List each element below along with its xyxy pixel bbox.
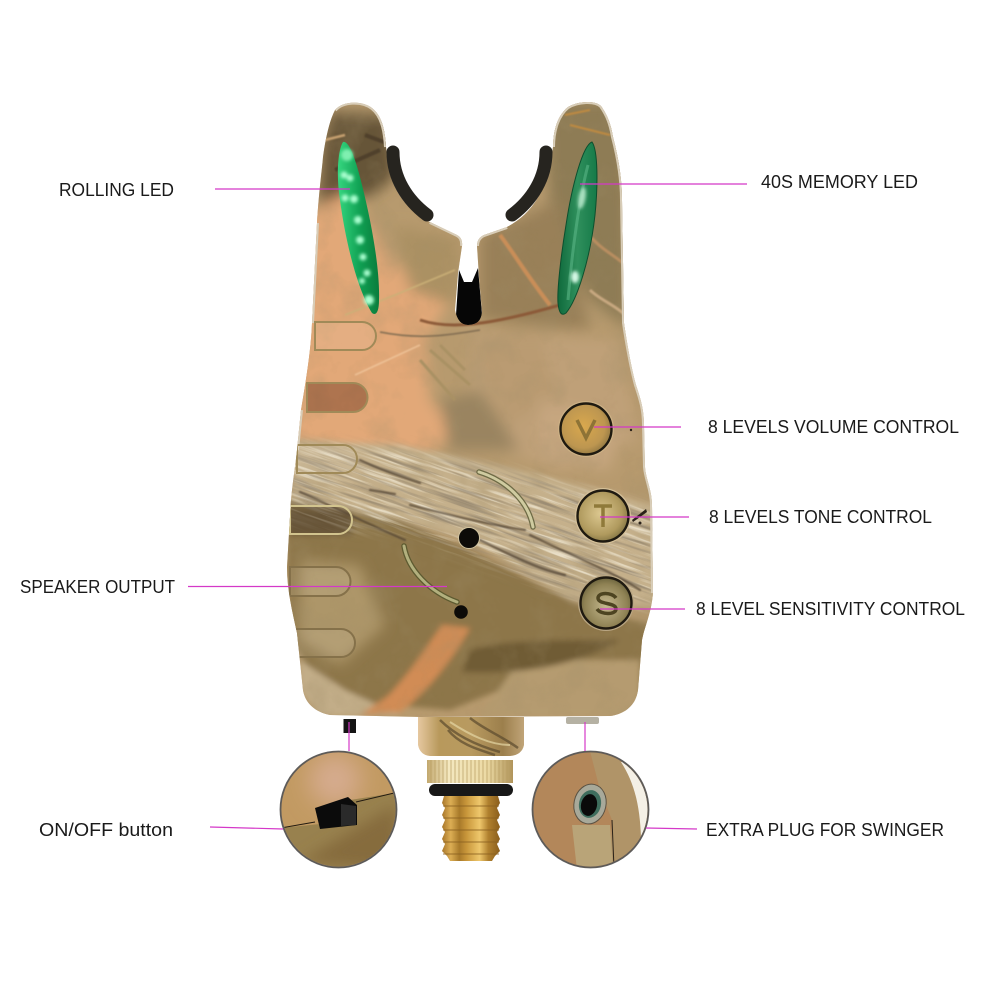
threaded mount	[418, 717, 524, 861]
brass thread	[442, 796, 500, 861]
alarm body	[287, 102, 653, 717]
black line clips	[393, 152, 546, 215]
line slot	[456, 268, 482, 326]
shell edge highlight	[297, 102, 653, 593]
camo shell	[287, 102, 653, 717]
finger grip slots	[290, 322, 376, 657]
knurled nut	[427, 760, 513, 783]
button: T	[575, 488, 631, 544]
speaker holes	[454, 528, 480, 619]
label: on/off: ON/OFF button	[39, 820, 173, 840]
LED: rolling	[338, 142, 379, 314]
label: memory LED: 40S MEMORY LED	[761, 172, 918, 192]
power switch stub	[344, 719, 356, 733]
soft mottling	[303, 118, 648, 658]
rubber O-ring	[429, 784, 513, 796]
inset: swinger plug	[532, 751, 652, 870]
label: tone: 8 LEVELS TONE CONTROL	[709, 507, 932, 527]
button: S	[578, 575, 634, 631]
label: swinger plug: EXTRA PLUG FOR SWINGER	[706, 820, 944, 840]
label: rolling LED: ROLLING LED	[59, 180, 174, 200]
marks near T button	[630, 429, 647, 524]
wood grain streaks	[291, 440, 652, 612]
label: sensitivity: 8 LEVEL SENSITIVITY CONTROL	[696, 599, 965, 619]
twig lines on upper camo	[325, 110, 625, 400]
LED: memory	[558, 142, 597, 314]
camo collar	[418, 717, 524, 756]
leader lines	[188, 184, 747, 829]
label: speaker: SPEAKER OUTPUT	[20, 577, 175, 597]
plug stub	[566, 717, 599, 724]
button: V	[558, 401, 614, 457]
label: volume: 8 LEVELS VOLUME CONTROL	[708, 417, 959, 437]
inset: on/off button	[280, 750, 400, 870]
embossed arcs	[404, 472, 533, 602]
